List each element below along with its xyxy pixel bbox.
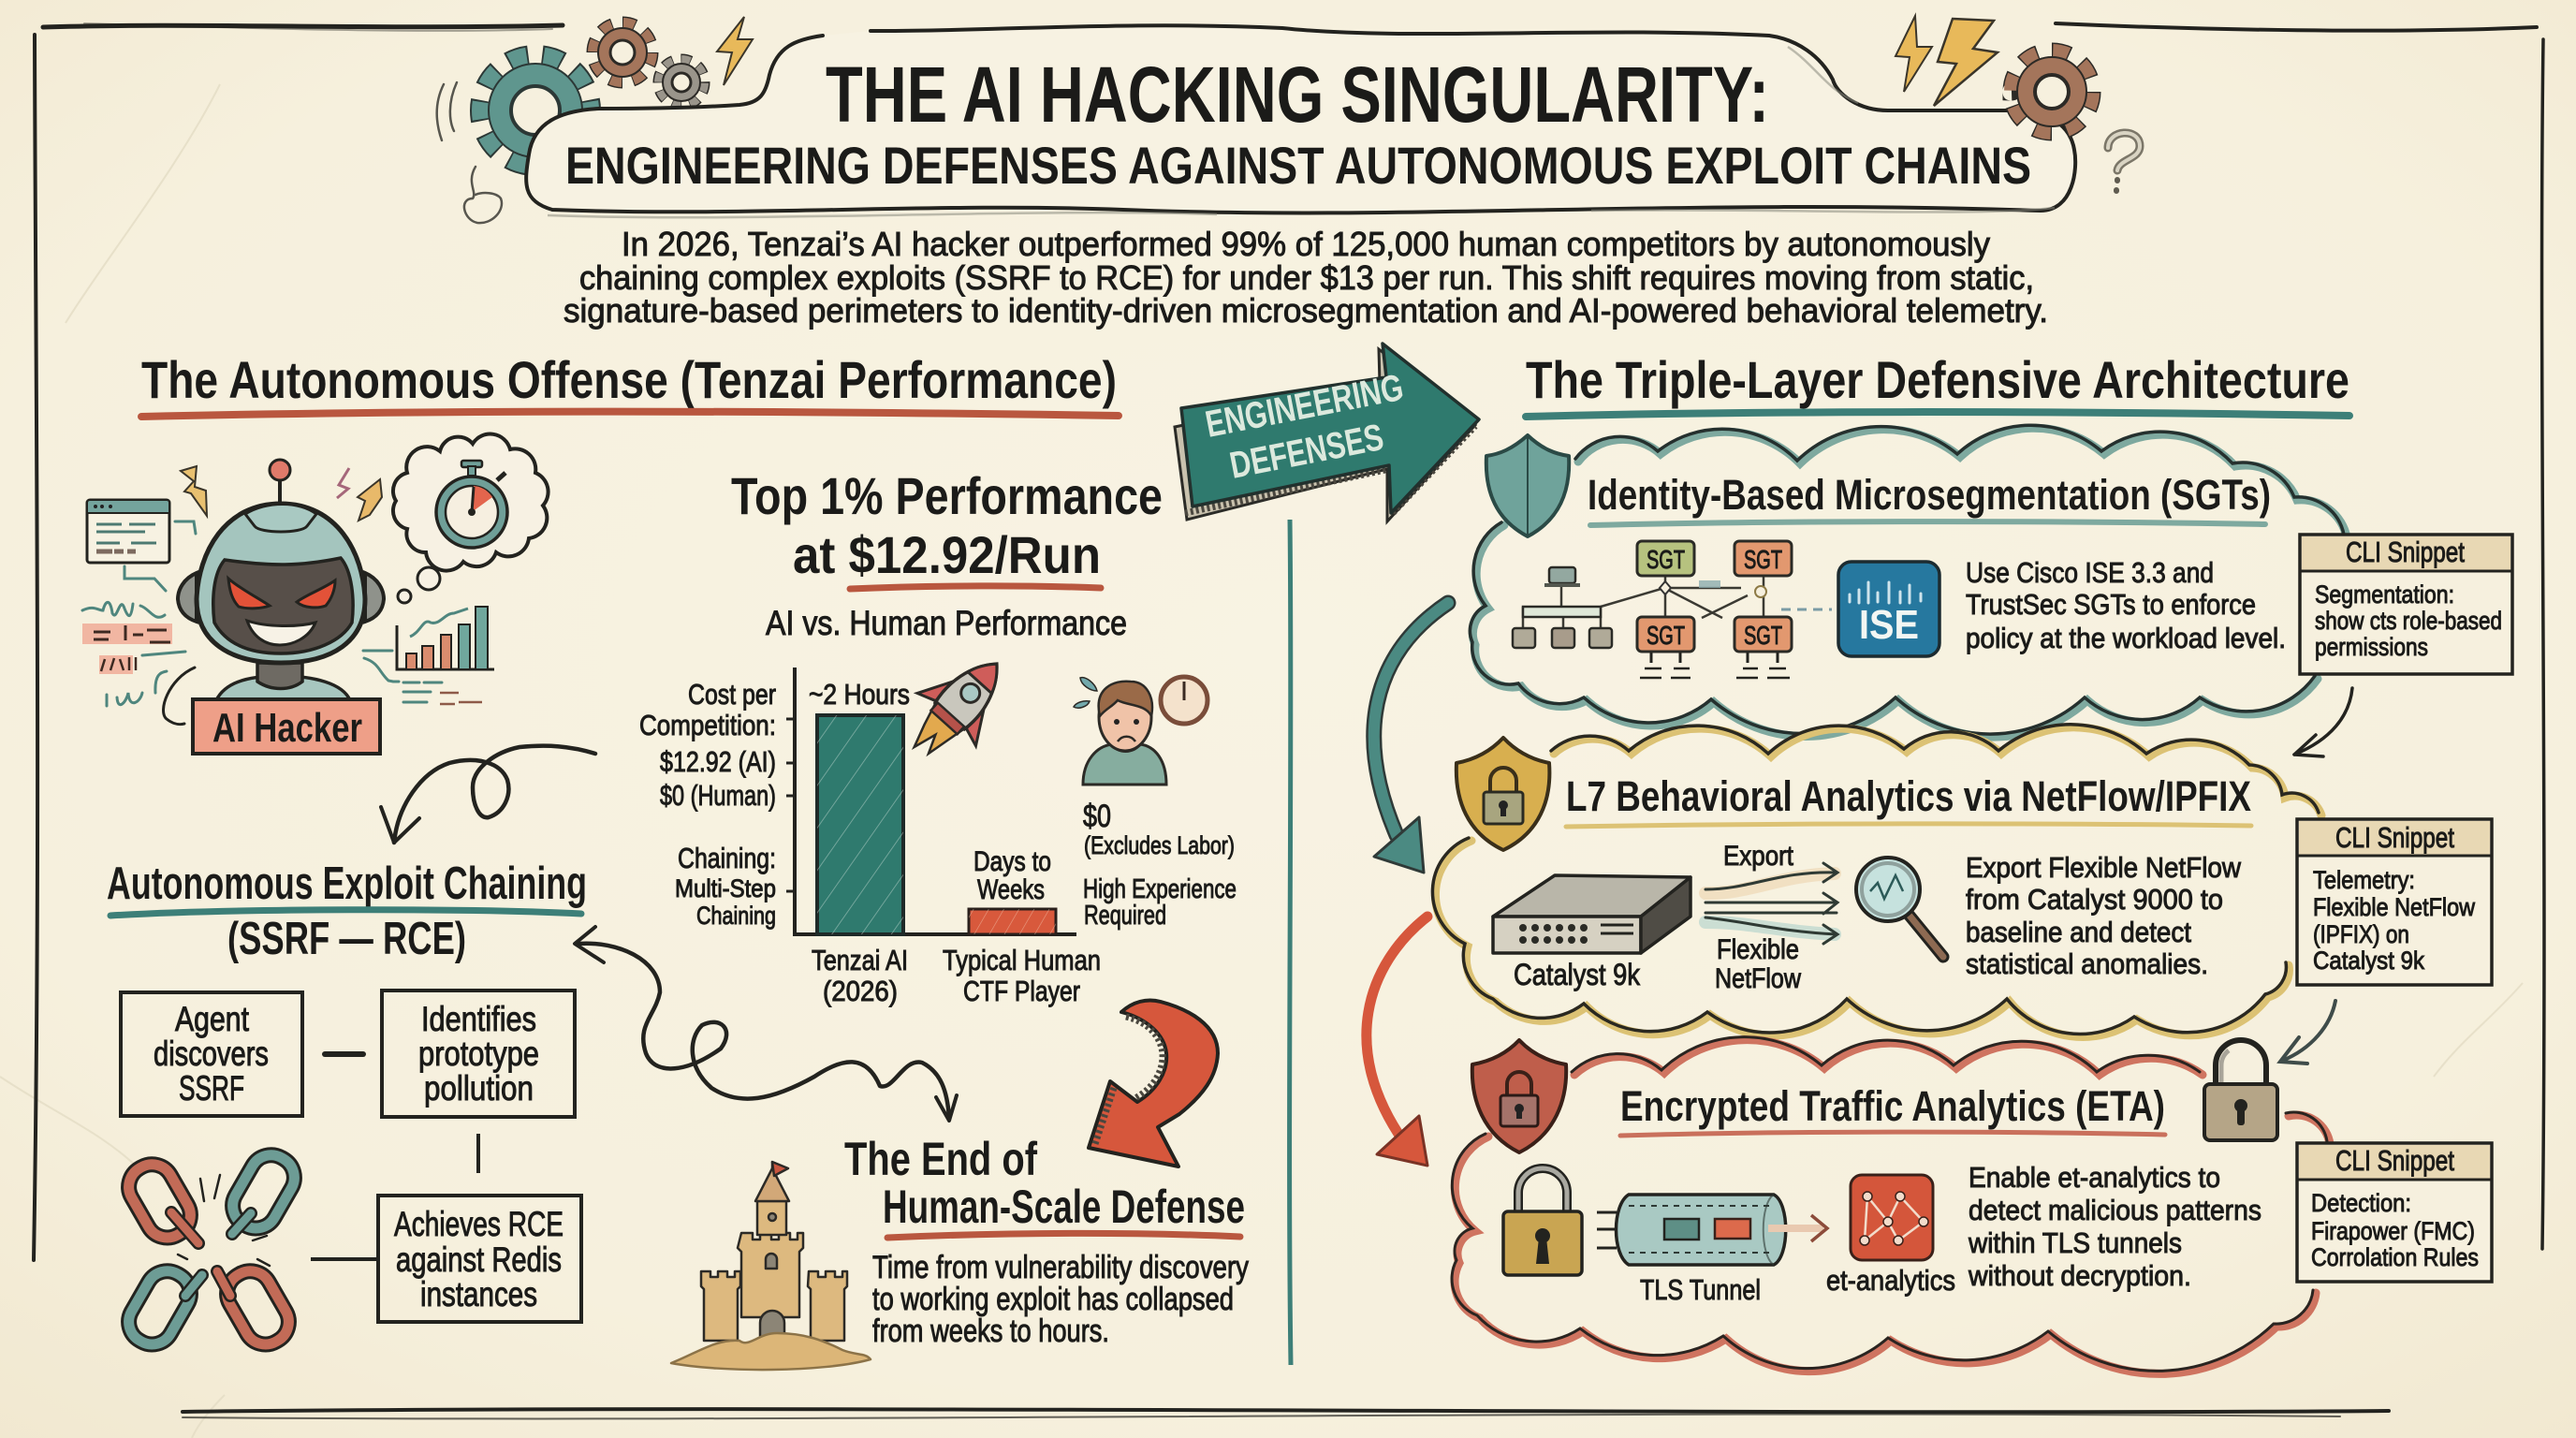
human notes: $0	[1083, 799, 1111, 834]
bar chart: AI vs human: Days to	[973, 846, 1051, 877]
text: SGT description	[1966, 556, 2286, 654]
human notes: Required	[1084, 901, 1166, 931]
box: achieves RCE: against Redis	[396, 1240, 562, 1279]
decorative circuit traces	[82, 521, 442, 706]
heading: top 1 percent performance: Top 1% Performance	[731, 466, 1163, 525]
panel: cloud behavioral analytics	[1432, 725, 2321, 1036]
panel: cloud identity microsegmentation	[1470, 425, 2347, 737]
icon: Catalyst switch	[1493, 875, 1690, 953]
heading: triple layer architecture: The Triple-Layer Defensive Architecture	[1526, 350, 2349, 409]
icon: sand castle	[671, 1162, 871, 1370]
diagram: SGT network: SGT	[1744, 621, 1782, 650]
heading: autonomous offense: The Autonomous Offense (Tenzai Performance)	[141, 350, 1117, 409]
icon: AI hacker robot	[178, 460, 384, 700]
intro paragraph	[564, 225, 2048, 330]
text: time collapse: to working exploit has collapsed	[872, 1282, 1234, 1317]
box: CLI snippet detection: Detection:	[2311, 1189, 2411, 1217]
heading: autonomous exploit chaining: (SSRF — RCE)	[227, 914, 466, 964]
arrow: red curved arrow	[1089, 1000, 1218, 1167]
arrow: CLI 2 to cloud 3	[2280, 1001, 2335, 1064]
bar chart: AI vs human: Tenzai AI	[812, 944, 908, 976]
icon: TLS tunnel	[1597, 1195, 1827, 1265]
box: CLI snippet segmentation: show cts role-based	[2315, 607, 2502, 635]
icon: brown gear	[593, 23, 651, 81]
chart title: AI vs. Human Performance	[766, 604, 1127, 642]
thought bubble	[393, 434, 549, 603]
decorative salmon code marks	[82, 624, 482, 704]
box: CLI snippet detection	[2297, 1143, 2492, 1282]
text: ETA description	[1968, 1161, 2261, 1292]
box: agent discovers SSRF: discovers	[154, 1034, 269, 1073]
diagram: SGT network: SGT	[1744, 545, 1782, 574]
box: identifies prototype pollution: Identifies	[421, 1000, 536, 1038]
box: agent discovers SSRF: SSRF	[179, 1069, 244, 1108]
label: flexible netflow: Flexible	[1717, 934, 1799, 965]
icon: gold shield with lock	[1456, 738, 1549, 850]
text: ETA description: within TLS tunnels	[1968, 1226, 2182, 1259]
text: SGT description: policy at the workload level.	[1966, 622, 2286, 654]
icon: brown gear right	[2012, 51, 2092, 132]
icon: lightning right large	[1934, 19, 1998, 106]
bar chart: AI vs human: Typical Human	[943, 944, 1101, 976]
bar chart: AI vs human: $0 (Human)	[660, 779, 776, 812]
box: CLI snippet telemetry: Telemetry:	[2313, 866, 2415, 894]
text: netflow description: from Catalyst 9000 to	[1966, 883, 2223, 916]
bar chart: AI vs human: $12.92 (AI)	[660, 745, 776, 778]
icon: lightning right small	[1895, 16, 1932, 92]
bar chart: AI vs human: ~2 Hours	[809, 678, 910, 711]
connector	[325, 1051, 363, 1057]
box: CLI snippet segmentation	[2300, 535, 2512, 674]
arrow: engineering defenses: ENGINEERING	[1202, 367, 1407, 446]
bar chart: AI vs human: Weeks	[977, 874, 1045, 905]
label: flexible netflow	[1715, 934, 1801, 994]
center divider	[1290, 520, 1291, 1365]
bar chart: AI vs human: Cost per	[688, 678, 776, 711]
box: CLI snippet telemetry: (IPFIX) on	[2313, 920, 2409, 948]
arrow: robot to chaining squiggle	[381, 746, 595, 843]
icon: large padlock	[2204, 1040, 2277, 1140]
box: CLI snippet telemetry: CLI Snippet	[2335, 821, 2454, 854]
heading: end of human-scale defense: The End of	[844, 1133, 1037, 1185]
icon: rocket	[889, 638, 1026, 777]
label: flexible netflow: NetFlow	[1715, 963, 1801, 994]
icon: mini squiggle	[337, 468, 349, 498]
box: CLI snippet segmentation: CLI Snippet	[2346, 536, 2465, 568]
box: achieves RCE: Achieves RCE	[394, 1205, 564, 1243]
arrow: red flow arrow	[1367, 917, 1427, 1166]
curl near robot	[164, 668, 195, 725]
icon: teal shield	[1486, 435, 1569, 536]
heading: end of human-scale defense	[844, 1133, 1245, 1238]
title frame	[526, 25, 2075, 217]
label: export: Export	[1723, 841, 1794, 872]
heading: top 1 percent performance: at $12.92/Run	[793, 525, 1101, 584]
label: et-analytics: et-analytics	[1826, 1264, 1955, 1297]
icon: browser window	[87, 500, 169, 563]
intro paragraph: signature-based perimeters to identity-driven microsegmentation and AI-powered behavioral telemetry.	[564, 291, 2048, 330]
box: agent discovers SSRF: Agent	[175, 1000, 250, 1038]
box: CLI snippet segmentation: Segmentation:	[2315, 580, 2454, 609]
heading: top 1 percent performance	[731, 466, 1163, 589]
icon: lightning left	[717, 17, 753, 85]
icon: gold padlock	[1503, 1168, 1582, 1275]
panel: cloud encrypted traffic	[1452, 1037, 2330, 1373]
connector	[476, 1134, 480, 1173]
bar chart: AI vs human: Multi-Step	[675, 874, 776, 902]
box: CLI snippet detection: Firapower (FMC)	[2311, 1217, 2475, 1245]
human notes: High Experience	[1083, 874, 1237, 904]
arrow: CLI 1 to cloud 2	[2294, 688, 2352, 756]
arrow: chaining to end of defense squiggle	[575, 927, 957, 1121]
arrow: engineering defenses	[1175, 344, 1479, 521]
flow arrows: export	[1705, 863, 1837, 944]
heading: autonomous exploit chaining	[107, 858, 587, 964]
text: SGT description: TrustSec SGTs to enforce	[1966, 588, 2256, 621]
bar chart: AI vs human: (2026)	[823, 975, 898, 1007]
arrow: teal flow arrow	[1374, 603, 1448, 873]
icon: mini bar chart	[397, 607, 494, 669]
label: TLS tunnel: TLS Tunnel	[1640, 1273, 1761, 1306]
icon: question mark	[2108, 133, 2140, 191]
icon: motion arcs and smoke curl	[437, 82, 502, 223]
box: achieves RCE: instances	[420, 1275, 537, 1313]
intro paragraph: chaining complex exploits (SSRF to RCE) for under $13 per run. This shift requires moving from static,	[579, 258, 2034, 297]
box: agent discovers SSRF	[121, 992, 302, 1116]
label: AI Hacker: AI Hacker	[212, 705, 362, 751]
text: ETA description: Enable et-analytics to	[1969, 1161, 2220, 1194]
icon: teal gear	[481, 56, 590, 165]
icon: Cisco ISE tile: ISE	[1859, 602, 1919, 648]
heading: encrypted traffic analytics: Encrypted Traffic Analytics (ETA)	[1620, 1082, 2165, 1130]
title: THE AI HACKING SINGULARITY:	[826, 51, 1769, 139]
box: identifies prototype pollution: pollution	[424, 1069, 534, 1108]
heading: end of human-scale defense: Human-Scale Defense	[883, 1181, 1245, 1233]
human notes	[1083, 799, 1237, 931]
box: CLI snippet detection: CLI Snippet	[2335, 1144, 2454, 1177]
heading: autonomous exploit chaining: Autonomous Exploit Chaining	[107, 858, 587, 909]
box: CLI snippet detection: Corrolation Rules	[2311, 1243, 2479, 1271]
box: identifies prototype pollution: prototype	[418, 1034, 539, 1073]
box: achieves RCE	[378, 1196, 581, 1322]
heading: identity microsegmentation: Identity-Based Microsegmentation (SGTs)	[1588, 471, 2271, 519]
bar chart: AI vs human: Competition:	[639, 709, 776, 741]
intro paragraph: In 2026, Tenzai’s AI hacker outperformed 99% of 125,000 human competitors by autonomously	[622, 225, 1990, 263]
bar chart: AI vs human: Chaining:	[678, 842, 776, 874]
subtitle: ENGINEERING DEFENSES AGAINST AUTONOMOUS EXPLOIT CHAINS	[565, 136, 2031, 195]
text: time collapse	[872, 1250, 1249, 1349]
text: time collapse: from weeks to hours.	[872, 1313, 1109, 1349]
box: identifies prototype pollution	[382, 990, 575, 1117]
bar chart: AI vs human	[639, 668, 1101, 1007]
icon: worried human with clock	[1074, 677, 1208, 785]
icon: et-analytics	[1851, 1175, 1933, 1260]
text: SGT description: Use Cisco ISE 3.3 and	[1966, 556, 2214, 589]
connector	[311, 1257, 376, 1261]
heading: behavioral analytics: L7 Behavioral Analytics via NetFlow/IPFIX	[1566, 772, 2251, 820]
bar chart: AI vs human: CTF Player	[963, 975, 1080, 1007]
text: netflow description: baseline and detect	[1966, 916, 2191, 948]
text: netflow description: statistical anomalies.	[1966, 947, 2208, 980]
box: CLI snippet telemetry: Catalyst 9k	[2313, 946, 2424, 975]
diagram: SGT network: SGT	[1647, 621, 1685, 650]
diagram: SGT network: SGT	[1647, 545, 1685, 574]
icon: Cisco ISE tile	[1838, 562, 1939, 656]
diagram: SGT network	[1513, 541, 1832, 678]
icon: lightning beside robot left	[181, 466, 207, 516]
text: ETA description: without decryption.	[1968, 1259, 2191, 1292]
icon: grey gear	[659, 60, 704, 105]
icon: red shield with lock	[1472, 1040, 1566, 1152]
label: AI Hacker	[193, 699, 380, 754]
icon: stopwatch	[436, 461, 507, 548]
text: ETA description: detect malicious patterns	[1969, 1194, 2261, 1226]
box: CLI snippet telemetry	[2297, 819, 2492, 985]
text: netflow description: Export Flexible NetFlow	[1966, 851, 2242, 884]
icon: broken chain	[121, 1147, 302, 1352]
arrow: engineering defenses: DEFENSES	[1226, 417, 1387, 487]
label: Catalyst 9k: Catalyst 9k	[1514, 958, 1641, 991]
human notes: (Excludes Labor)	[1084, 831, 1235, 859]
icon: lightning beside robot right	[358, 479, 382, 521]
box: CLI snippet telemetry: Flexible NetFlow	[2313, 893, 2475, 921]
text: netflow description	[1966, 851, 2242, 980]
box: CLI snippet segmentation: permissions	[2315, 633, 2428, 661]
text: time collapse: Time from vulnerability discovery	[872, 1250, 1249, 1285]
icon: magnifier	[1856, 858, 1943, 957]
bar chart: AI vs human: Chaining	[696, 902, 776, 930]
